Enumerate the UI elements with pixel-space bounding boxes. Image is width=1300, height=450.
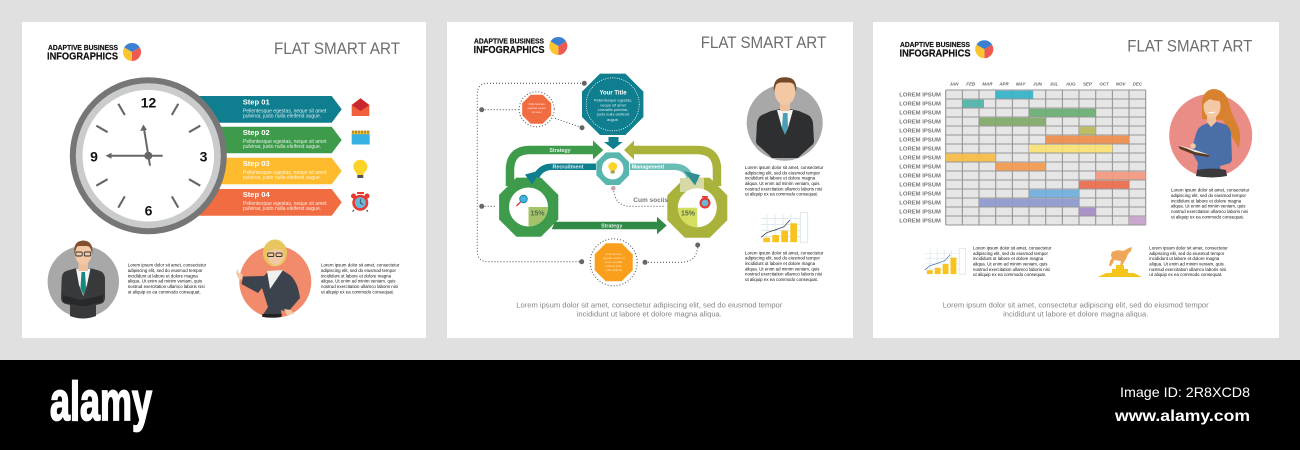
month labels: NOV [1116,82,1127,87]
logo: adaptive business infographics [47,43,141,62]
month labels: MAY [1016,82,1026,87]
text block: man description: Lorem ipsum dolor sit amet, consectetur [745,165,824,170]
icon: alarm clock [351,192,370,212]
row labels: LOREM IPSUM [899,174,941,180]
arrow: step 03: pulvinar, justo nulla eleifend augue. [243,175,321,181]
text block: chart description: incididunt ut labore et dolore magna [745,261,816,266]
logo: adaptive business infographics: ADAPTIVE BUSINESS [474,36,544,46]
arrow: recruitment [525,165,596,184]
text block: woman description [1171,188,1250,219]
logo: adaptive business infographics: INFOGRAPHICS [47,50,118,62]
arrow: strategy top [510,140,603,186]
octagon: small orange note: egestas neque [528,106,546,110]
arrow: step 02 [195,127,342,153]
row labels: LOREM IPSUM [899,146,941,152]
footer text: Lorem ipsum dolor sit amet, consectetur adipiscing elit, sed do eiusmod tempor [516,301,783,310]
arrow: strategy top: Strategy [549,148,571,154]
text block: woman [321,263,400,294]
text block: chart description: Lorem ipsum dolor sit amet, consectetur [973,246,1052,250]
octagon: small orange note [519,92,554,127]
row labels: LOREM IPSUM [899,128,941,134]
person: man with crossed arms [48,240,119,318]
logo: adaptive business infographics: ADAPTIVE BUSINESS [900,40,970,49]
text block: horse description: nostrud exercitation ullamco laboris nisi [1149,267,1226,272]
text block: man [128,263,207,294]
octagon: your title: justo nulla eleifend [596,112,629,117]
row labels: LOREM IPSUM [899,200,941,206]
clock [70,77,227,234]
footer text [516,301,783,319]
text block: man description: adipiscing elit, sed do eiusmod tempor [745,170,820,175]
row labels [899,92,941,224]
clock: 6 [145,202,153,218]
arrow: step 02: Step 02 [243,128,270,137]
text block: chart description: aliqua. Ut enim ad minim veniam, quis [745,266,820,271]
row labels: LOREM IPSUM [899,182,941,188]
text block: horse description: adipiscing elit, sed do eiusmod tempor [1149,251,1225,256]
month labels: APR [998,82,1009,87]
text block: chart description: adipiscing elit, sed do eiusmod tempor [973,251,1048,256]
logo: adaptive business infographics: INFOGRAPHICS [474,44,544,56]
arrow: management: Management [632,165,664,171]
month labels: SEP [1083,82,1092,87]
octagon: your title: neque sit amet [600,102,627,107]
octagon: left green 15% [499,178,558,237]
gantt chart [946,90,1146,225]
label: cum sociis: Cum sociis [633,197,668,204]
octagon: bulb hub [596,152,629,185]
arrow: management [630,165,700,186]
logo: adaptive business infographics: ADAPTIVE BUSINESS [48,43,118,52]
octagon: bottom orange note: amet convallis [605,260,623,264]
arrow head: olive [624,140,634,160]
text block: chart description [745,250,824,282]
logo: adaptive business infographics: INFOGRAPHICS [900,48,970,60]
footer text [943,301,1209,319]
text block: man: Lorem ipsum dolor sit amet, consectetur [128,263,207,268]
text block: man description: nostrud exercitation ullamco laboris nisi [745,186,822,191]
arrow: step 02: Pellentesque egestas, neque sit amet [243,139,327,145]
icon: horse on coins [1098,247,1142,277]
dotted connectors [477,81,700,265]
text block: man description: incididunt ut labore et dolore magna [745,176,816,181]
person: man with hands on hips [747,77,823,161]
title: FLAT SMART ART [701,34,826,52]
panel: clock slide [22,22,426,338]
octagon: right olive 15%: 15% [681,210,696,218]
text block: man description: aliqua. Ut enim ad minim veniam, quis [745,181,820,186]
octagon: your title: convallis pulvinar, [598,107,628,112]
text block: man: nostrud exercitation ullamco laboris nisi [128,284,205,289]
arrow: step 03: Step 03 [243,159,270,168]
person: pointing woman [236,240,311,318]
row labels: LOREM IPSUM [899,120,941,126]
site url: www.alamy.com [1114,408,1250,425]
month labels: DEC [1133,82,1143,87]
octagon: small orange note: sit amet [532,110,542,114]
chart icon: rising bars [925,248,966,274]
arrow: step 02: pulvinar, justo nulla eleifend augue. [243,144,321,150]
arrow: recruitment: Recruitment [553,165,584,171]
text block: chart description: nostrud exercitation ullamco laboris nisi [973,267,1050,272]
octagon: bottom orange note: pulvinar justo [605,264,622,268]
icon: envelope [352,98,369,116]
octagon: your title: augue. [607,117,619,122]
text block: chart description: incididunt ut labore et dolore magna [973,256,1044,261]
logo: adaptive business infographics [900,40,993,60]
text block: woman: adipiscing elit, sed do eiusmod tempor [321,268,396,273]
arrow: down into hub [604,137,623,149]
arrow: step 04: Pellentesque egestas, neque sit amet [243,201,327,207]
chart icon: rising bars [761,213,808,242]
text block: man: ut aliquip ex ea commodo consequat. [128,289,201,294]
footer text: incididunt ut labore et dolore magna aliqua. [1003,310,1148,319]
text block: horse description: aliqua. Ut enim ad minim veniam, quis [1149,262,1225,266]
octagon: your title: Your Title [599,90,627,96]
octagon: bottom orange note: egestas neque sit [603,256,625,260]
text block: woman description: incididunt ut labore et dolore magna [1171,198,1242,203]
arrow: olive return [634,150,717,186]
clock: 12 [141,94,156,110]
clock: 9 [90,148,98,164]
text block: woman: nostrud exercitation ullamco laboris nisi [321,284,398,289]
text block: chart description: Lorem ipsum dolor sit amet, consectetur [745,250,824,255]
arrow: strategy bottom: Strategy [601,224,622,230]
text block: chart description: adipiscing elit, sed do eiusmod tempor [745,256,820,261]
arrow: step 04 [195,189,342,216]
icon: notepad [352,130,370,144]
title: FLAT SMART ART [1127,38,1252,56]
month labels: OCT [1099,82,1109,87]
text block: woman description: aliqua. Ut enim ad minim veniam, quis [1171,204,1246,209]
arrow: step 01 [195,96,342,123]
row labels: LOREM IPSUM [899,164,941,170]
month labels: MAR [982,82,993,87]
text block: woman: incididunt ut labore et dolore magna [321,273,392,278]
text block: chart description: nostrud exercitation ullamco laboris nisi [745,272,822,277]
arrow: step 01: pulvinar, justo nulla eleifend augue. [243,113,321,119]
text block: man: aliqua. Ut enim ad minim veniam, quis [128,279,203,284]
text block: man: incididunt ut labore et dolore magna [128,273,198,278]
arrow: step 04: Step 04 [243,190,270,199]
arrow: step 03: Pellentesque egestas, neque sit amet [243,170,327,176]
month labels: JUL [1050,82,1058,87]
row labels: LOREM IPSUM [899,110,941,116]
octagon: bottom orange note: nulla eleifend [605,268,622,272]
octagon: left green 15%: 15% [530,210,545,218]
text block: woman: ut aliquip ex ea commodo consequat. [321,289,394,294]
month labels: JAN [950,82,959,87]
text block: woman description: nostrud exercitation ullamco laboris nisi [1171,209,1248,214]
row labels: LOREM IPSUM [899,218,941,224]
octagon: bottom orange note: Pellentesque [606,252,622,256]
row labels: LOREM IPSUM [899,102,941,108]
row labels: LOREM IPSUM [899,92,941,98]
row labels: LOREM IPSUM [899,156,941,162]
text block: horse description [1149,246,1228,277]
footer text: Lorem ipsum dolor sit amet, consectetur adipiscing elit, sed do eiusmod tempor [943,301,1209,310]
octagon: your title [582,74,643,135]
image id: Image ID: 2R8XCD8 [1120,384,1250,400]
arrow: strategy bottom [552,217,667,234]
clock: 3 [200,148,208,164]
month labels: JUN [1033,82,1043,87]
row labels: LOREM IPSUM [899,210,941,216]
text block: man description: ut aliquip ex ea commodo consequat. [745,192,818,197]
row labels: LOREM IPSUM [899,192,941,198]
octagon: bottom orange note [590,239,637,286]
text block: woman description: ut aliquip ex ea commodo consequat. [1171,214,1244,219]
panel: flow diagram slide [447,22,853,338]
arrow: step 01: Step 01 [243,98,270,106]
month labels: FEB [966,82,976,87]
logo: adaptive business infographics [474,36,567,56]
brand: alamy: alamy [50,370,152,432]
icon: light bulb [353,160,367,178]
text block: woman description: Lorem ipsum dolor sit amet, consectetur [1171,188,1250,193]
text block: horse description: Lorem ipsum dolor sit amet, consectetur [1149,246,1228,250]
arrow: step 01: Pellentesque egestas, neque sit amet [243,108,327,114]
text block: woman: aliqua. Ut enim ad minim veniam, quis [321,279,396,284]
arrow: step 04: pulvinar, justo nulla eleifend augue. [243,206,321,212]
month labels: AUG [1065,82,1076,87]
text block: woman: Lorem ipsum dolor sit amet, consectetur [321,263,400,268]
octagon: small orange note: Pellentesque [529,102,545,106]
text block: man: adipiscing elit, sed do eiusmod tempor [128,268,203,273]
footer text: incididunt ut labore et dolore magna aliqua. [577,310,722,319]
row labels: LOREM IPSUM [899,138,941,144]
octagon: your title: Pellentesque egestas, [594,98,632,103]
text block: woman description: adipiscing elit, sed do eiusmod tempor [1171,193,1246,198]
title: FLAT SMART ART [274,40,400,58]
text block: chart description [973,246,1052,277]
octagon: right olive 15% [667,178,727,238]
text block: horse description: incididunt ut labore et dolore magna [1149,256,1220,261]
text block: man description [745,165,824,197]
text block: chart description: aliqua. Ut enim ad minim veniam, quis [973,262,1048,266]
person: woman with notebook [1169,89,1252,178]
month labels [950,82,1143,87]
arrow: step 03 [195,158,342,184]
panel: gantt slide [873,22,1279,338]
text block: horse description: ut aliquip ex ea commodo consequat. [1149,272,1222,277]
text block: chart description: ut aliquip ex ea commodo consequat. [973,272,1046,277]
text block: chart description: ut aliquip ex ea commodo consequat. [745,277,818,282]
watermark band [0,360,1300,450]
